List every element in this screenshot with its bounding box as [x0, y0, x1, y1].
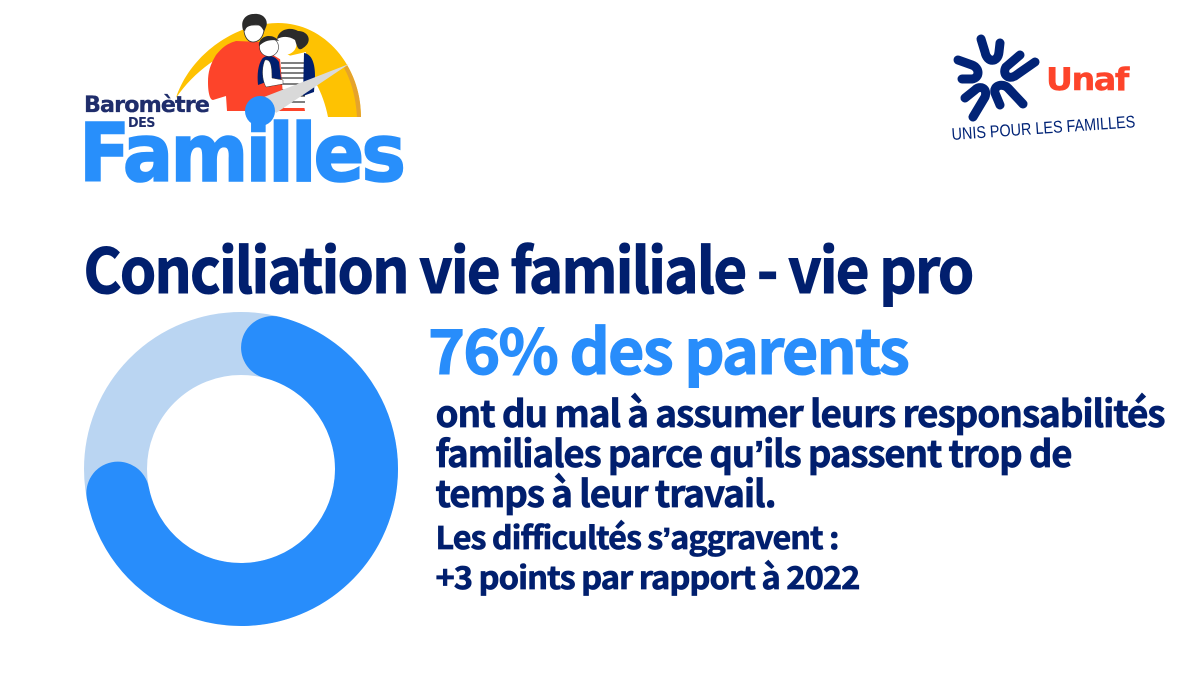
- gauge pivot: [245, 96, 275, 126]
- logo: Baromètre des Familles: [79, 14, 403, 200]
- line 3: temps à leur travail.: [436, 464, 776, 518]
- donut value arc: [118, 348, 367, 595]
- title: Conciliation vie familiale - vie pro: [84, 221, 973, 311]
- illustration: family: [208, 14, 315, 111]
- logo: Unaf: [951, 39, 1136, 144]
- emblem arm: bottom right: [995, 85, 1023, 105]
- child body: [258, 56, 281, 85]
- tagline: UNIS POUR LES FAMILLES: [951, 112, 1136, 144]
- donut chart: 76%: [116, 344, 367, 595]
- gauge arc: [176, 23, 361, 117]
- mother top: [280, 52, 307, 108]
- line 4: Les difficultés s ’aggravent :: [436, 513, 838, 558]
- emblem arm: top: [981, 39, 1000, 60]
- emblem arm: bottom left: [965, 88, 986, 117]
- emblem: [958, 39, 1035, 117]
- line 5: +3 points par rapport à 2022: [436, 553, 860, 598]
- mother stripes: [281, 63, 305, 102]
- father hoodie: [208, 41, 305, 111]
- wordmark: Unaf: Unaf: [1046, 62, 1130, 98]
- emblem arm: left: [958, 60, 978, 79]
- child hair: [259, 36, 279, 46]
- father head: [244, 25, 264, 42]
- mother head: [276, 34, 296, 54]
- donut track: [116, 344, 366, 594]
- child arm: [262, 60, 283, 87]
- mother sleeve: [303, 53, 315, 96]
- headline: 76% des parents: 76% des parents: [428, 302, 908, 392]
- gauge arc shaded edge: [344, 65, 361, 117]
- child head: [260, 38, 278, 56]
- text block: statistic description: [436, 384, 1165, 598]
- mother hair: [277, 29, 309, 49]
- emblem arm: right: [1005, 55, 1035, 77]
- line 2: familiales parce qu’ils passent trop de: [436, 424, 1072, 478]
- gauge needle: [264, 64, 349, 113]
- logo word: Baromètre: Baromètre: [84, 93, 209, 118]
- logo word: Familles: Familles: [79, 107, 403, 200]
- line 1: ont du mal à assumer leurs responsabilités: [436, 384, 1165, 438]
- father hair: [242, 14, 267, 32]
- logo word: DES: DES: [128, 116, 155, 131]
